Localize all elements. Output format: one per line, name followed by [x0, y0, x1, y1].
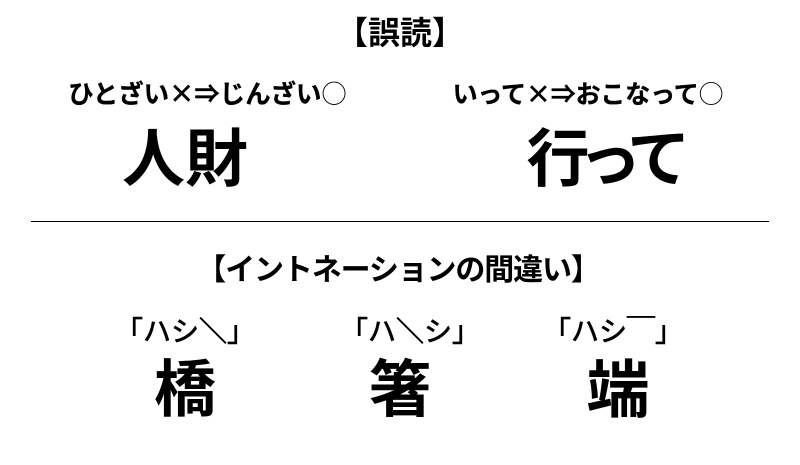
- large word: chopsticks: 箸: [369, 356, 431, 425]
- large word: bridge: 橋: [154, 356, 216, 425]
- large word: edge: 端: [586, 356, 650, 426]
- reading note: itte to okonatte: いって×⇒おこなって○: [453, 75, 723, 111]
- pitch note: hashi 3: 「ハシ￣」: [543, 316, 683, 347]
- heading: misreading: 【誤読】: [336, 15, 464, 51]
- divider line: [31, 221, 769, 222]
- large word: jinzai: 人財: [122, 125, 248, 195]
- heading: intonation mistakes: 【イントネーションの間違い】: [196, 254, 600, 287]
- pitch note: hashi 2: 「ハ＼シ」: [340, 316, 480, 347]
- pitch note: hashi 1: 「ハシ＼」: [115, 316, 255, 347]
- large word: okonatte: 行って: [527, 125, 679, 195]
- reading note: hitozai to jinzai: ひとざい×⇒じんざい○: [68, 75, 347, 111]
